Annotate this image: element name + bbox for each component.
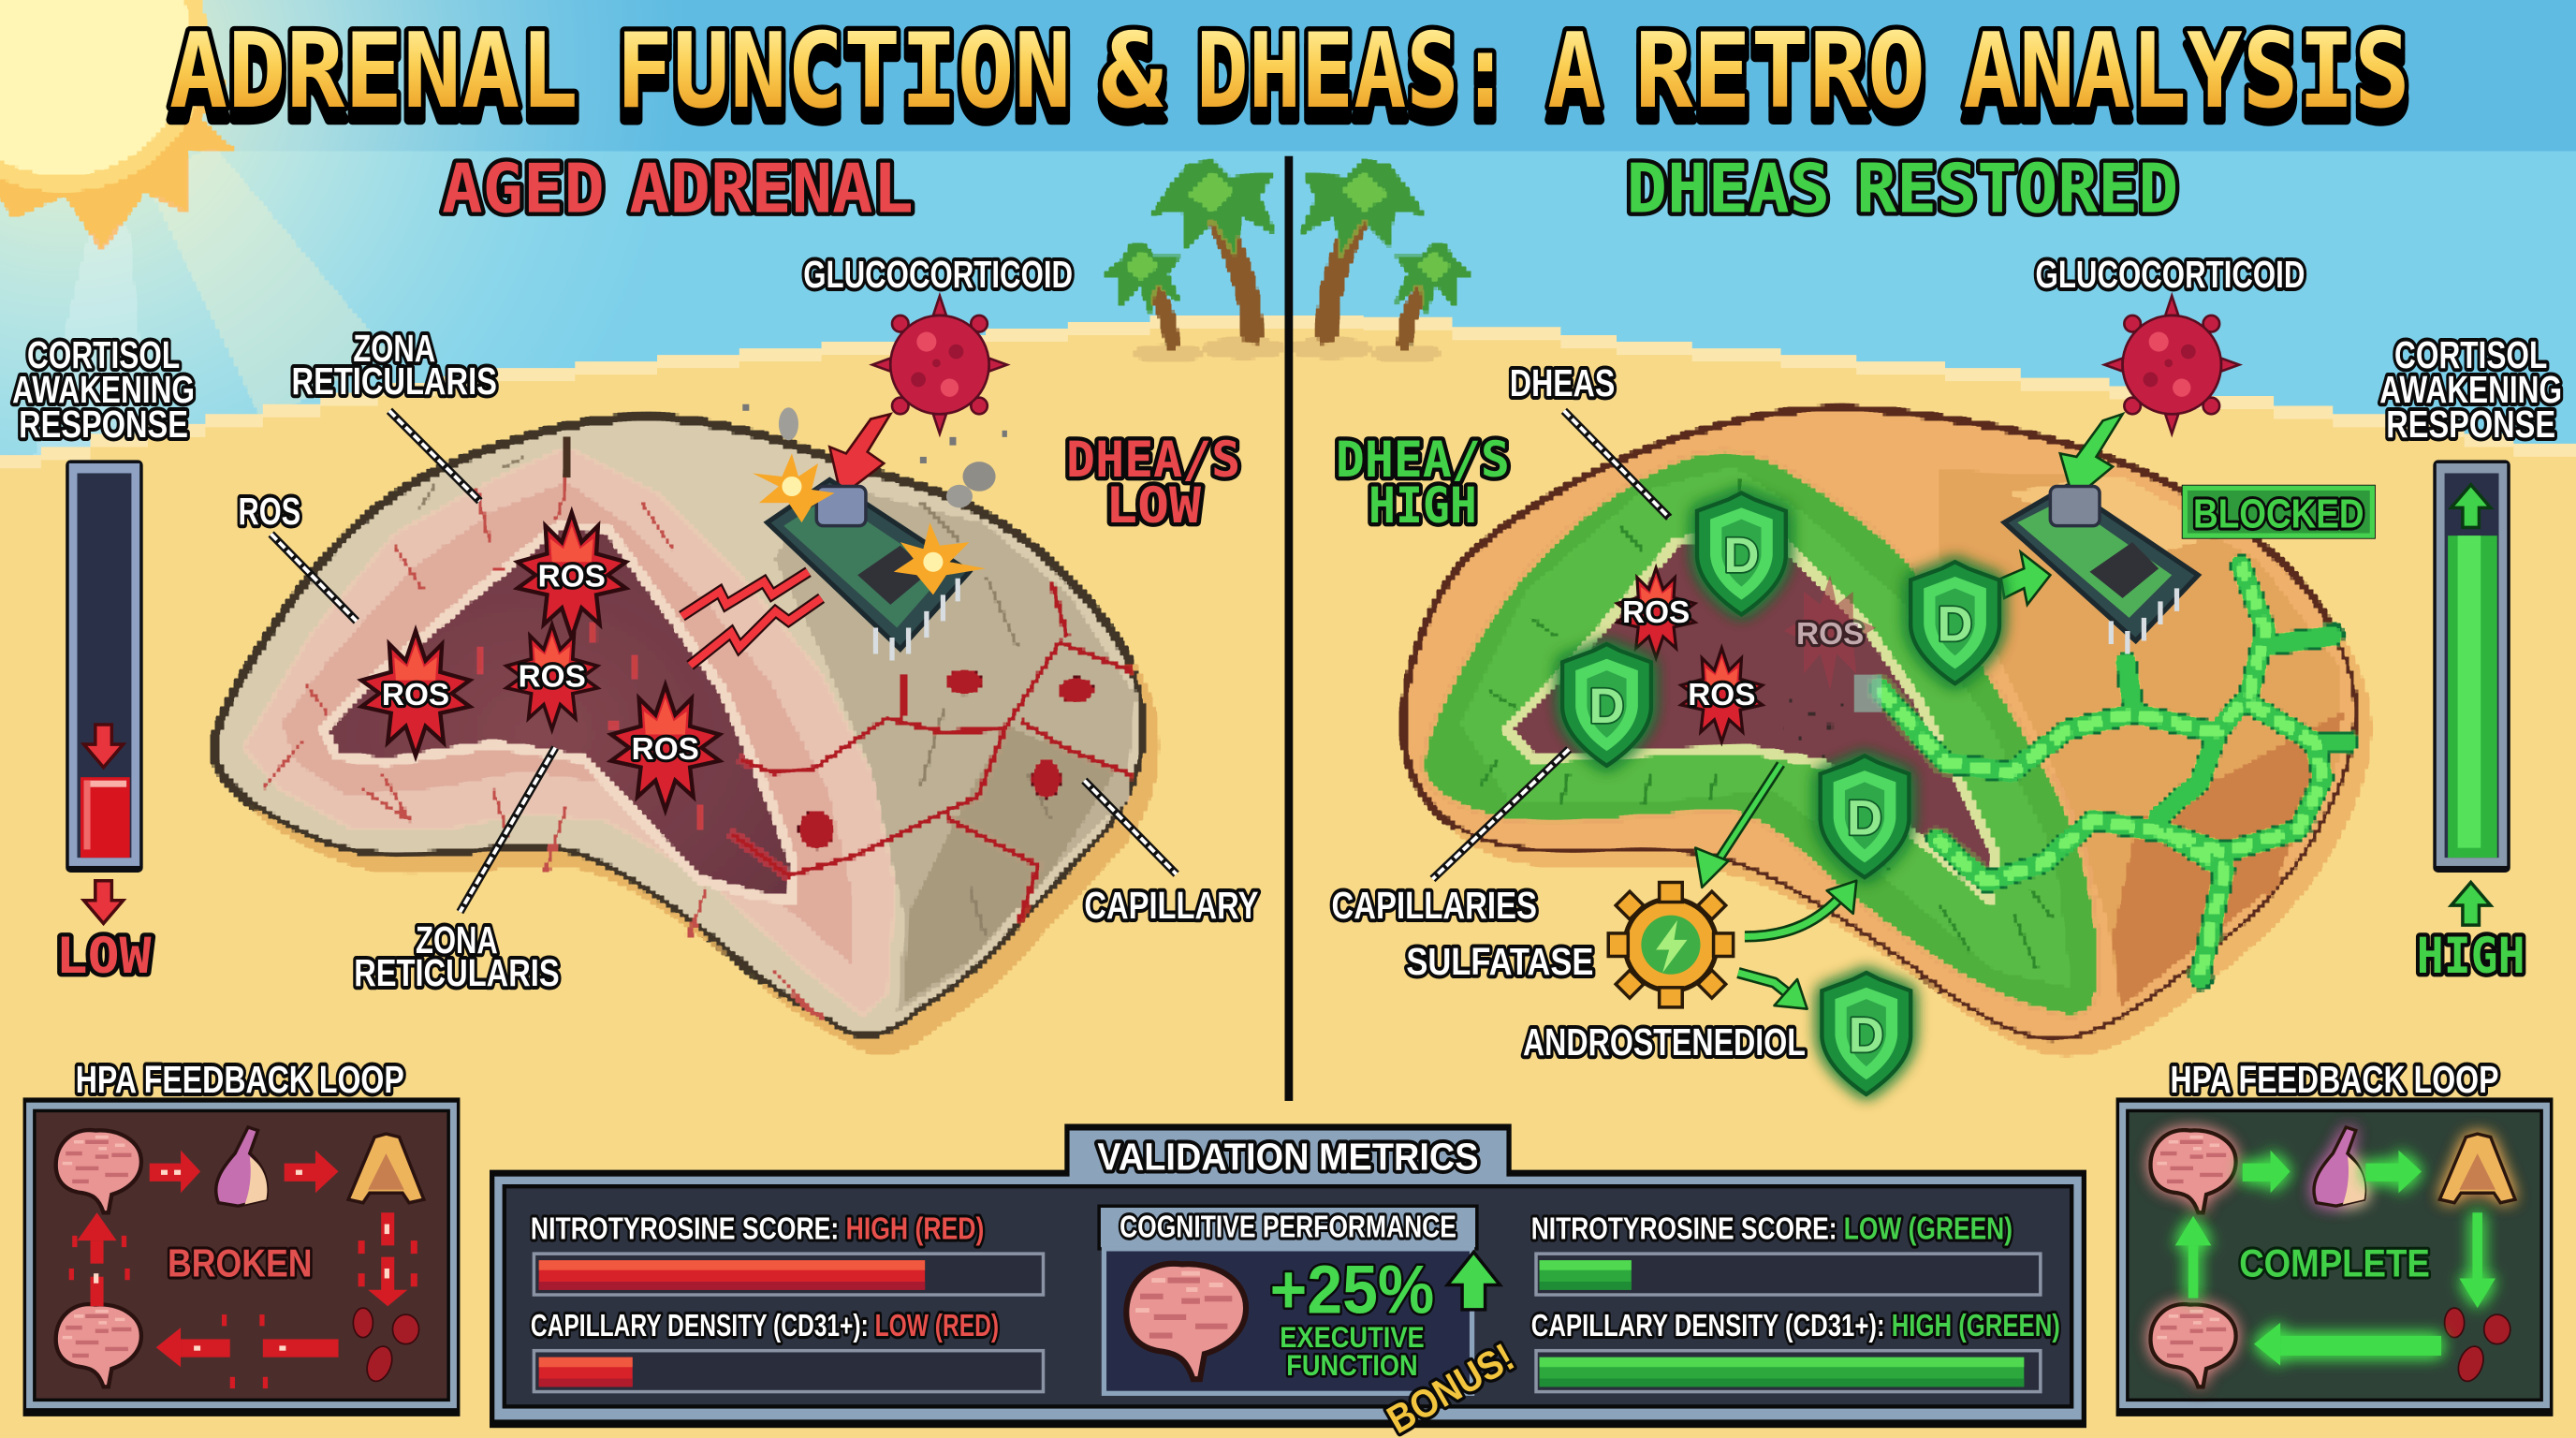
protected chip receptor (2004, 487, 2198, 654)
high indicator: HIGH (2417, 928, 2525, 985)
label: androstenediol: ANDROSTENEDIOL (1523, 1020, 1806, 1064)
ROS burst 4: ROS (632, 732, 699, 767)
title: A (1547, 11, 1602, 132)
panel: cognitive performance: +25% (1270, 1250, 1434, 1328)
label: zona reticularis top: ZONA (353, 327, 435, 370)
metric: nitrotyrosine left: NITROTYROSINE SCORE: HIGH (RED) (531, 1211, 984, 1246)
label: capillary: CAPILLARY (1084, 884, 1258, 927)
badge: blocked: BLOCKED (2193, 491, 2364, 536)
shield 4 (1821, 756, 1909, 877)
label: dhea/s high: DHEA/S (1336, 432, 1510, 489)
panel: hpa loop broken (23, 1058, 460, 1416)
central divider (1284, 156, 1293, 1101)
cortisol gauge right (2379, 333, 2562, 873)
label: ros pointer: ROS (238, 490, 300, 533)
label: sulfatase: SULFATASE (1406, 940, 1593, 983)
label: dheas: DHEAS (1510, 361, 1615, 404)
ROS burst 3 (506, 624, 597, 729)
label: glucocorticoid left: GLUCOCORTICOID (803, 253, 1073, 296)
fading ROS (1784, 575, 1876, 690)
glucocorticoid virus left (872, 296, 1007, 433)
sun with rays (0, 0, 386, 468)
ROS burst small 2 (1681, 648, 1763, 741)
fading ROS: ROS (1796, 617, 1864, 652)
label: zona reticularis bottom: RETICULARIS (354, 951, 560, 994)
beach sand (0, 315, 2576, 1438)
label: zona reticularis bottom: ZONA (416, 918, 498, 961)
label: dhea/s low: DHEA/S (1066, 432, 1240, 489)
ROS burst small: ROS (1622, 595, 1690, 630)
ROS burst small (1617, 568, 1695, 658)
leader lines right (1432, 411, 1669, 879)
low indicator: LOW (56, 928, 152, 985)
label: dhea/s low: LOW (1105, 477, 1201, 535)
metric: capillary density right: CAPILLARY DENSITY (CD31+): HIGH (GREEN) (1531, 1309, 2060, 1343)
heading: aged adrenal: AGED (442, 149, 605, 227)
arrow: glucocorticoid hits receptor (829, 414, 890, 496)
cortisol gauge left (12, 333, 195, 873)
ROS burst 1 (518, 513, 626, 638)
explosions (742, 404, 1007, 594)
leader lines left (271, 411, 1177, 912)
shield 3: D (1588, 679, 1624, 734)
title: ANALYSIS (1963, 11, 2410, 132)
shield 2: D (1938, 596, 1973, 652)
shield 5 androstenediol (1822, 973, 1910, 1094)
shield 1 (1697, 493, 1786, 614)
palm trees left (1104, 161, 1283, 361)
title: DHEAS: (1196, 11, 1512, 132)
panel: hpa loop complete: COMPLETE (2239, 1241, 2430, 1285)
panel: cognitive performance: FUNCTION (1286, 1348, 1418, 1382)
lightning damage (681, 572, 822, 666)
panel: hpa loop complete (2116, 1058, 2553, 1416)
tab title: VALIDATION METRICS (1097, 1136, 1479, 1179)
label: zona reticularis top: RETICULARIS (292, 360, 497, 403)
cortisol gauge left: CORTISOL (27, 333, 180, 376)
panel: validation metrics (490, 1123, 2086, 1428)
cortisol gauge left: AWAKENING (12, 368, 195, 411)
palm trees right (1292, 161, 1472, 361)
label: capillaries: CAPILLARIES (1332, 884, 1537, 927)
arrow: shield to chip (2001, 552, 2050, 605)
title: FUNCTION (616, 11, 1071, 132)
cortisol gauge left: RESPONSE (19, 403, 188, 446)
heading: dheas restored: DHEAS (1627, 149, 1830, 227)
ROS burst 1: ROS (538, 560, 606, 594)
heading: dheas restored: RESTORED (1856, 149, 2178, 227)
metric: nitrotyrosine right (1531, 1211, 2041, 1295)
panel: hpa loop complete: HPA FEEDBACK LOOP (2170, 1058, 2499, 1101)
metric: capillary density left: CAPILLARY DENSITY (CD31+): LOW (RED) (531, 1309, 999, 1343)
title: & (1101, 11, 1164, 132)
label: dhea/s high: HIGH (1368, 477, 1477, 535)
enzyme arrows (1695, 764, 1856, 1009)
sky background (0, 0, 2576, 690)
ROS burst 2: ROS (382, 678, 449, 712)
shield 4: D (1847, 791, 1882, 846)
title: ADRENAL (169, 11, 578, 132)
arrow: blocked glucocorticoid (2060, 414, 2123, 500)
shield 3 (1562, 644, 1651, 766)
aged adrenal organ (215, 418, 1158, 1053)
sulfatase gear (1608, 882, 1734, 1007)
panel: cognitive performance: COGNITIVE PERFORMANCE (1120, 1211, 1456, 1245)
low indicator (56, 881, 152, 985)
glucocorticoid virus right (2104, 296, 2239, 433)
panel: hpa loop broken: HPA FEEDBACK LOOP (76, 1058, 404, 1101)
heading: aged adrenal: ADRENAL (629, 149, 914, 227)
restored adrenal organ (1405, 409, 2371, 1055)
high indicator (2417, 882, 2525, 985)
ROS burst 4 (611, 685, 720, 810)
panel: cognitive performance (1099, 1206, 1500, 1393)
shield 1: D (1723, 528, 1759, 583)
shield 5 androstenediol: D (1849, 1007, 1884, 1063)
panel: hpa loop broken: BROKEN (168, 1241, 312, 1285)
ROS burst small 2: ROS (1688, 678, 1755, 712)
shield 2 (1910, 562, 1999, 683)
metric: nitrotyrosine right: NITROTYROSINE SCORE: LOW (GREEN) (1531, 1211, 2012, 1246)
title: RETRO (1634, 11, 1925, 132)
ROS burst 3: ROS (519, 660, 586, 695)
ROS burst 2 (361, 631, 470, 756)
metric: nitrotyrosine left (531, 1211, 1043, 1295)
damaged chip receptor (768, 479, 970, 661)
metric: capillary density left (531, 1309, 1043, 1392)
label: glucocorticoid right: GLUCOCORTICOID (2036, 253, 2305, 296)
metric: capillary density right (1531, 1309, 2060, 1392)
panel: cognitive performance: EXECUTIVE (1280, 1320, 1425, 1354)
